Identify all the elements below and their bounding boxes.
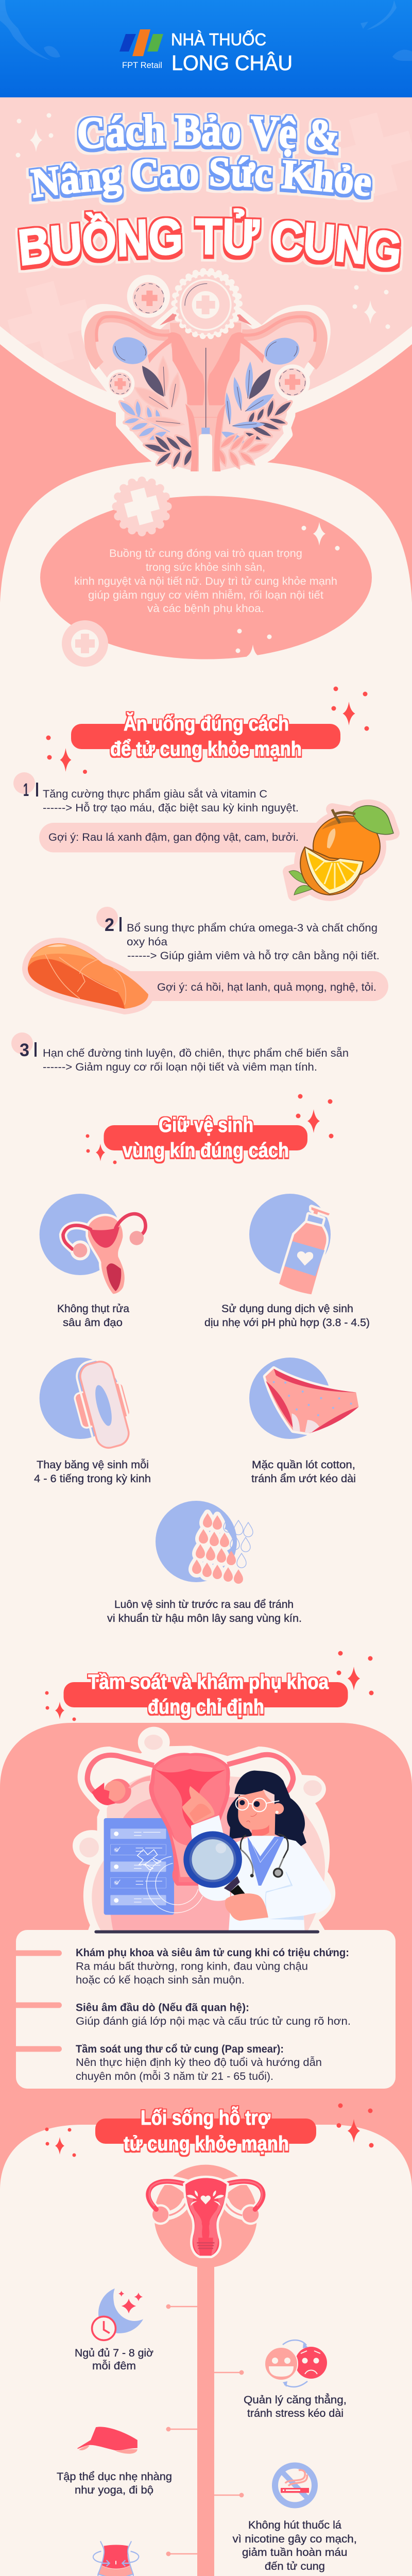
icon: cotton underwear [265, 1369, 358, 1433]
item 2: omega-3: 2 [105, 915, 114, 935]
item 3: limit sugar [11, 1032, 349, 1073]
heading: screening: Tầm soát và khám phụ khoa [88, 1671, 329, 1693]
caption [107, 1599, 302, 1624]
hygiene card 3: pad [34, 1355, 151, 1485]
item 2: omega-3: ------> Giúp giảm viêm và hỗ trợ cân bằng nội tiết. [127, 950, 380, 962]
intro text: giúp giảm nguy cơ viêm nhiễm, rối loạn nội tiết [88, 589, 323, 601]
title line 3: BUỒNG TỬ CUNG [15, 206, 404, 275]
card text: gynecological exam: hoặc có kế hoạch sinh sản muộn. [76, 1974, 245, 1986]
icon: no smoking [275, 2466, 315, 2505]
icon: uterus [63, 1214, 147, 1294]
caption: vì nicotine gây co mạch, [233, 2533, 357, 2545]
caption [57, 1303, 129, 1329]
intro text: trong sức khỏe sinh sản, [146, 562, 265, 573]
card text: gynecological exam: Ra máu bất thường, rong kinh, đau vùng chậu [76, 1961, 308, 1972]
clipboard [104, 1818, 202, 1915]
item 1: iron and vitamin C: 1 [23, 780, 29, 800]
icon: happy and sad faces [265, 2340, 327, 2387]
caption: như yoga, đi bộ [75, 2484, 153, 2496]
caption [244, 2394, 347, 2419]
item 2: omega-3: oxy hóa [127, 936, 167, 948]
title line 2: Nâng Cao Sức Khỏe [26, 155, 375, 205]
caption: tránh stress kéo dài [247, 2408, 344, 2419]
card text: pap smear [76, 2043, 322, 2082]
caption: Luôn vệ sinh từ trước ra sau để tránh [114, 1599, 294, 1611]
caption: đến tử cung [265, 2561, 325, 2572]
icon: waist [93, 2541, 139, 2576]
card text: transvaginal ultrasound: Siêu âm đầu dò (Nếu đã quan hệ): [76, 2002, 249, 2013]
caption: mỗi đêm [92, 2360, 136, 2372]
heading: hygiene [85, 1094, 334, 1164]
lifestyle item: no smoking [233, 2466, 357, 2572]
lifestyle item: exercise [57, 2427, 172, 2496]
card bullet bars [13, 1951, 62, 2052]
heading: hygiene: Giữ vệ sinh [159, 1114, 253, 1137]
caption: Mặc quần lót cotton, [252, 1459, 355, 1471]
logo text: FPT Retail: FPT Retail [122, 60, 162, 70]
logo text: pharmacy name: NHÀ THUỐC [171, 29, 266, 49]
heading: lifestyle [45, 2103, 374, 2157]
item 2: omega-3 [96, 907, 388, 1001]
caption [75, 2347, 153, 2372]
cream hump background [0, 460, 412, 1752]
intro text [74, 548, 337, 615]
card text: gynecological exam [76, 1947, 349, 1986]
icon: orange [289, 806, 393, 895]
caption: Tập thể dục nhẹ nhàng [57, 2471, 172, 2483]
heading: hygiene: vùng kín đúng cách [123, 1139, 289, 1162]
item 3: limit sugar: 3 [20, 1040, 29, 1060]
title line 1: Cách Bảo Vệ & [75, 112, 341, 159]
card text: transvaginal ultrasound: Giúp đánh giá lớp nội mạc và cấu trúc tử cung rõ hơn. [76, 2015, 351, 2027]
caption: Thay băng vệ sinh mỗi [37, 1459, 149, 1471]
intro text: kinh nguyệt và nội tiết nữ. Duy trì tử cung khỏe mạnh [74, 575, 337, 587]
item 1: iron and vitamin C [13, 772, 333, 852]
timeline stem [166, 2257, 244, 2576]
card text: transvaginal ultrasound [76, 2002, 351, 2027]
caption: Sử dụng dung dịch vệ sinh [221, 1303, 353, 1315]
logo text: pharmacy name [171, 29, 293, 75]
heading: eating: để tử cung khỏe mạnh [110, 738, 302, 760]
lifestyle item: sleep [75, 2289, 153, 2372]
caption [204, 1303, 370, 1329]
caption: giảm tuần hoàn máu [242, 2547, 347, 2558]
item 1: iron and vitamin C: ------> Hỗ trợ tạo máu, đặc biệt sau kỳ kinh nguyệt. [43, 802, 299, 814]
caption: 4 - 6 tiếng trong kỳ kinh [34, 1473, 151, 1485]
item 1: iron and vitamin C: Tăng cường thực phẩm giàu sắt và vitamin C [43, 788, 267, 800]
item 3: limit sugar: Hạn chế đường tinh luyện, đồ chiên, thực phẩm chế biến sẵn [43, 1047, 349, 1059]
intro panel: salmon ellipse [40, 481, 372, 668]
icon: sanitary pad [74, 1355, 135, 1454]
caption: tránh ẩm ướt kéo dài [251, 1473, 356, 1485]
lifestyle item: weight [52, 2541, 180, 2576]
icon: moon and clock [92, 2289, 143, 2340]
icon: wash bottle [279, 1207, 330, 1294]
caption [251, 1459, 356, 1485]
hygiene card 1: uterus [40, 1194, 147, 1329]
caption [233, 2519, 357, 2572]
item 2: omega-3: Bổ sung thực phẩm chứa omega-3 và chất chống [127, 922, 377, 934]
heading: lifestyle: Lối sống hỗ trợ [141, 2106, 270, 2129]
hero illustration: uterus with leaves [85, 271, 326, 479]
logo text: pharmacy name: LONG CHÂU [171, 51, 293, 75]
hygiene card 4: underwear [249, 1358, 358, 1485]
heading: eating [46, 686, 369, 774]
header band [0, 0, 412, 97]
card text: pap smear: Nên thực hiện định kỳ theo độ tuổi và hướng dẫn [76, 2057, 322, 2069]
lifestyle item: stress [244, 2340, 347, 2419]
heading: screening [45, 1651, 374, 1721]
hero sparkles [15, 113, 390, 329]
card text: pap smear: chuyên môn (mỗi 3 năm từ 21 - 65 tuổi). [76, 2071, 273, 2082]
icon: sun visor [78, 2427, 138, 2454]
caption [34, 1459, 151, 1485]
title [15, 112, 404, 275]
heading: eating: Ăn uống đúng cách [124, 712, 289, 735]
sparkles [236, 522, 340, 668]
heading: lifestyle: tử cung khỏe mạnh [124, 2132, 289, 2155]
hygiene card 2: bottle [204, 1194, 370, 1329]
item 1: iron and vitamin C: Gợi ý: Rau lá xanh đậm, gan động vật, cam, bưởi. [48, 832, 299, 843]
intro text: và các bệnh phụ khoa. [147, 603, 264, 615]
card text: pap smear: Tầm soát ung thư cổ tử cung (Pap smear): [76, 2043, 284, 2055]
badge: scalloped cross [116, 481, 168, 532]
caption [57, 2471, 172, 2496]
icon: water drops [192, 1513, 253, 1584]
caption: sâu âm đạo [63, 1317, 123, 1329]
caption: Không hút thuốc lá [248, 2519, 341, 2531]
caption: vi khuẩn từ hậu môn lây sang vùng kín. [107, 1613, 302, 1624]
hero background [0, 97, 412, 618]
panel: screening background [0, 1723, 412, 2576]
item 2: omega-3: Gợi ý: cá hồi, hạt lanh, quả mọng, nghệ, tỏi. [157, 981, 376, 993]
hygiene card 5: drops [107, 1501, 302, 1624]
badge: round cross [62, 620, 108, 667]
caption: Không thụt rửa [57, 1303, 129, 1315]
panel: screening card [13, 1930, 396, 2089]
card text: gynecological exam: Khám phụ khoa và siêu âm tử cung khi có triệu chứng: [76, 1947, 349, 1959]
icon: salmon fillet [28, 943, 148, 1009]
intro text: Buồng tử cung đóng vai trò quan trọng [109, 548, 302, 560]
illustration: doctor with uterus and clipboard [73, 1727, 335, 1934]
logo: FPT flags [119, 29, 163, 56]
caption: Ngủ đủ 7 - 8 giờ [75, 2347, 153, 2359]
heading: screening: đúng chỉ định [148, 1696, 264, 1718]
panel: lifestyle background [0, 2125, 412, 2576]
caption: dịu nhẹ với pH phù hợp (3.8 - 4.5) [204, 1317, 370, 1329]
icon: healthy uterus with circle [147, 2165, 264, 2268]
caption: Quản lý căng thẳng, [244, 2394, 347, 2406]
item 3: limit sugar: ------> Giảm nguy cơ rối loạn nội tiết và viêm mạn tính. [43, 1061, 317, 1073]
